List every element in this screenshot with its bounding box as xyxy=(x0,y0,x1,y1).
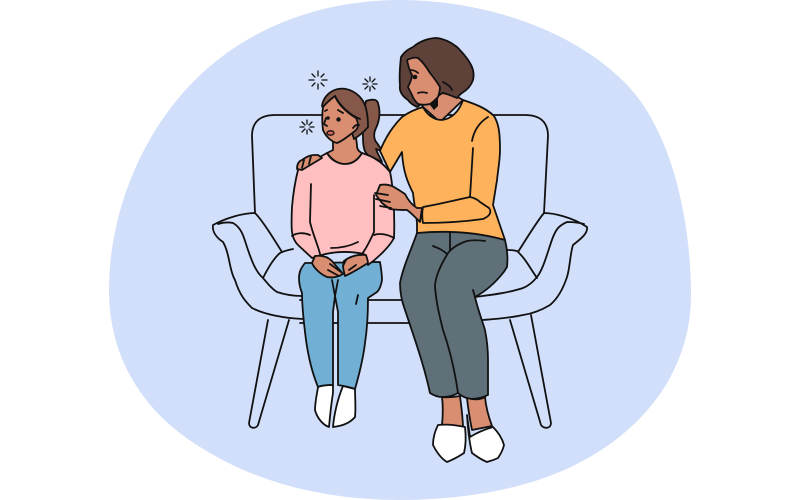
girl xyxy=(292,89,394,427)
woman forearm xyxy=(422,197,490,223)
right armrest xyxy=(475,213,587,320)
socks xyxy=(315,385,355,427)
girl features xyxy=(324,96,360,128)
sweater folds xyxy=(470,117,488,197)
woman shoes xyxy=(433,415,504,462)
right leg xyxy=(510,315,551,428)
woman ankles xyxy=(442,396,492,430)
girl face xyxy=(322,96,358,143)
woman sweater xyxy=(380,100,505,240)
woman hair xyxy=(400,38,474,107)
jeans xyxy=(299,262,382,389)
woman pants xyxy=(400,232,507,399)
chair back xyxy=(252,115,548,213)
armchair xyxy=(213,115,587,428)
spark left xyxy=(300,120,314,134)
woman hand on girl shoulder xyxy=(297,155,322,170)
spark top xyxy=(309,71,327,89)
neck xyxy=(327,130,362,164)
left armrest xyxy=(213,213,303,319)
girl sweater xyxy=(292,153,394,265)
ponytail xyxy=(363,100,382,162)
left leg xyxy=(249,320,289,428)
neck shadow xyxy=(430,98,438,110)
girl hands xyxy=(312,255,368,277)
background blob xyxy=(109,0,691,500)
pants folds xyxy=(433,233,485,393)
sweater folds xyxy=(292,184,394,254)
woman features xyxy=(410,70,452,93)
woman hand on girl arm xyxy=(376,185,422,222)
seat front xyxy=(300,300,425,323)
woman neck xyxy=(420,92,463,122)
girl hair back xyxy=(322,89,368,139)
spark right xyxy=(363,77,377,91)
woman face xyxy=(407,58,440,105)
woman xyxy=(297,38,507,462)
jeans folds xyxy=(332,280,358,304)
icon: dizzy sparks xyxy=(300,71,377,134)
